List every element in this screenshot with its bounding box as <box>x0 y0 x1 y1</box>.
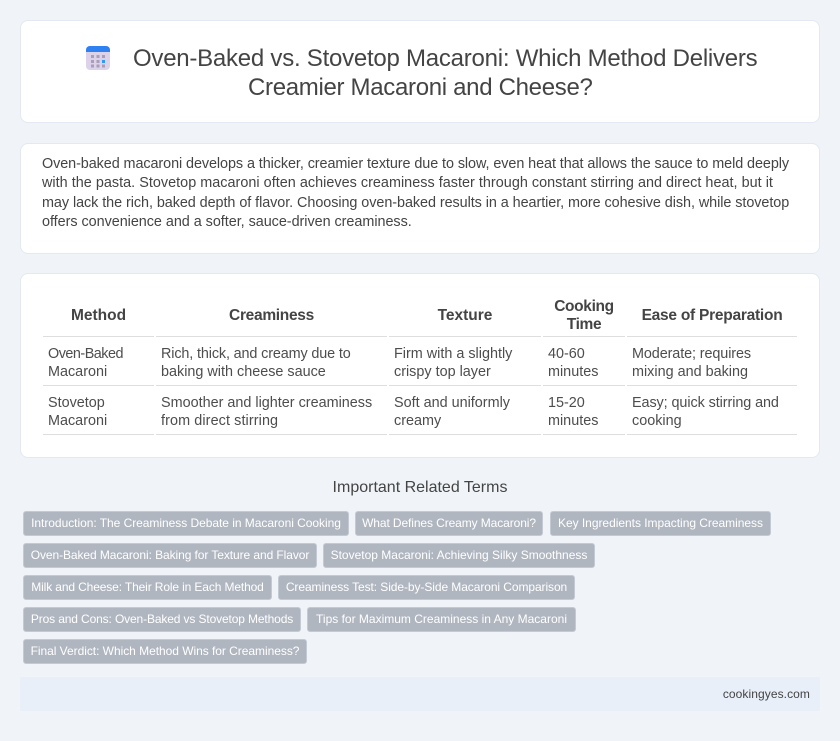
intro text: may lack the rich, baked depth of flavor. Choosing oven-baked results in a heartier, more cohesive dish, while stovetop <box>42 195 789 211</box>
intro text <box>42 156 789 230</box>
comparison table: Soft and uniformly <box>394 395 510 411</box>
related terms tags: Tips for Maximum Creaminess in Any Macaroni <box>316 612 567 626</box>
comparison table: Firm with a slightly <box>394 346 512 362</box>
comparison table: Cooking <box>554 298 614 314</box>
related terms tags: Final Verdict: Which Method Wins for Creaminess? <box>31 644 299 658</box>
related terms tags: Introduction: The Creaminess Debate in Macaroni Cooking <box>31 516 341 530</box>
header card <box>20 20 820 123</box>
title: Creamier Macaroni and Cheese? <box>248 74 593 101</box>
intro panel <box>20 143 820 254</box>
comparison table: Method <box>71 307 126 324</box>
comparison table: crispy top layer <box>394 364 491 380</box>
comparison table <box>43 298 797 435</box>
comparison table panel <box>20 273 820 458</box>
comparison table: Creaminess <box>229 307 314 324</box>
title: Oven-Baked vs. Stovetop Macaroni: Which Method Delivers <box>133 45 757 72</box>
comparison table: Time <box>567 316 601 333</box>
related terms tags <box>23 511 771 664</box>
related terms tags: What Defines Creamy Macaroni? <box>362 516 536 530</box>
comparison table: baking with cheese sauce <box>161 364 326 380</box>
comparison table: Moderate; requires <box>632 346 751 362</box>
related terms tags: Pros and Cons: Oven-Baked vs Stovetop Methods <box>31 612 293 626</box>
comparison table: Macaroni <box>48 364 107 380</box>
comparison table: cooking <box>632 413 682 429</box>
related terms tags: Stovetop Macaroni: Achieving Silky Smoothness <box>331 548 587 562</box>
comparison table: minutes <box>548 364 598 380</box>
related terms tags: Oven-Baked Macaroni: Baking for Texture and Flavor <box>31 548 309 562</box>
comparison table: Ease of Preparation <box>642 307 782 324</box>
related terms tags: Milk and Cheese: Their Role in Each Method <box>31 580 264 594</box>
comparison table: from direct stirring <box>161 413 278 429</box>
comparison table: Texture <box>438 307 492 324</box>
comparison table: mixing and baking <box>632 364 748 380</box>
comparison table: 40-60 <box>548 346 585 362</box>
related terms tags: Key Ingredients Impacting Creaminess <box>558 516 763 530</box>
comparison table: Stovetop <box>48 395 105 411</box>
related terms heading: Important Related Terms <box>333 479 507 496</box>
intro text: with the pasta. Stovetop macaroni often achieves creaminess faster through constant stirring and direct heat, but it <box>42 175 773 191</box>
title <box>133 45 757 101</box>
icon: calendar <box>86 46 110 70</box>
comparison table: Rich, thick, and creamy due to <box>161 346 351 362</box>
comparison table: Macaroni <box>48 413 107 429</box>
comparison table: minutes <box>548 413 598 429</box>
comparison table: Easy; quick stirring and <box>632 395 779 411</box>
comparison table: Oven-Baked <box>48 346 123 362</box>
comparison table: 15-20 <box>548 395 585 411</box>
comparison table: Smoother and lighter creaminess <box>161 395 372 411</box>
footer source text: cookingyes.com <box>723 687 810 701</box>
intro text: offers convenience and a softer, sauce-driven creaminess. <box>42 214 412 230</box>
related terms tags: Creaminess Test: Side-by-Side Macaroni Comparison <box>286 580 567 594</box>
comparison table: creamy <box>394 413 441 429</box>
footer bar <box>20 677 820 711</box>
intro text: Oven-baked macaroni develops a thicker, creamier texture due to slow, even heat that allows the sauce to meld deeply <box>42 156 789 172</box>
